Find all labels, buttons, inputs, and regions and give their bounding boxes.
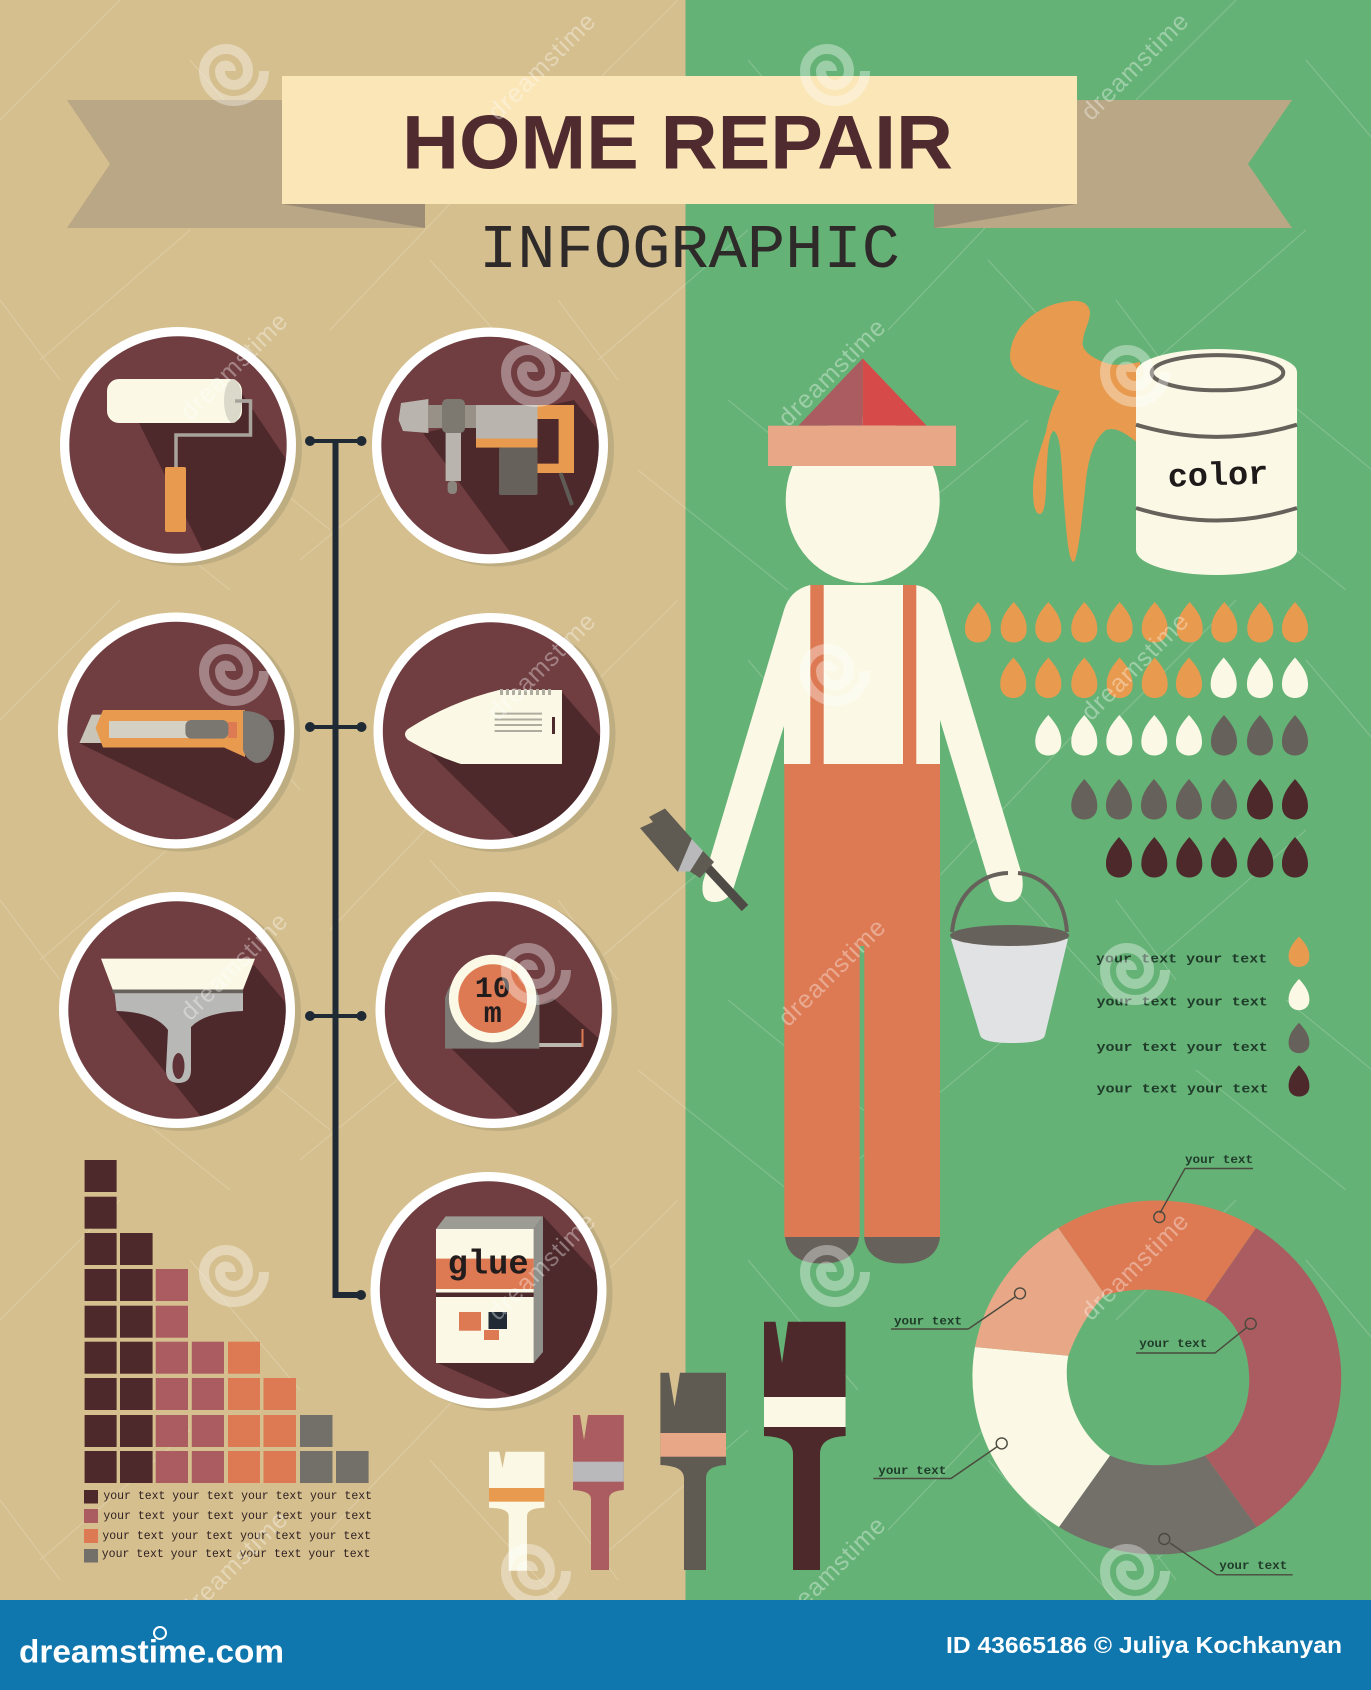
bucket (950, 925, 1069, 1043)
icon: putty knife (59, 892, 301, 1131)
donut callouts: your text (1139, 1337, 1207, 1351)
drops legend: your text your text (1096, 952, 1267, 966)
bucket handle (952, 873, 1067, 932)
worker figure (640, 358, 1069, 1263)
hand brush (640, 808, 745, 908)
watermark: dreamstime (483, 607, 602, 726)
icon: paint roller (60, 327, 302, 566)
suspenders (810, 585, 916, 765)
icon: tape measure (376, 892, 618, 1131)
trousers (784, 764, 940, 1237)
drops legend: your text your text (1096, 995, 1268, 1009)
body and arms (702, 585, 1023, 902)
paint splash (1010, 301, 1140, 562)
watermark: dreamstime (1076, 7, 1195, 126)
footer credit: ID 43665186 © Juliya Kochkanyan (946, 1632, 1342, 1658)
icon: rose brush (573, 1415, 624, 1570)
footer logo: dreamstime.com (19, 1634, 284, 1670)
watermark: dreamstime (1076, 607, 1195, 726)
connector line (306, 436, 366, 1300)
bar chart legend (84, 1490, 372, 1562)
donut callouts: your text (1185, 1153, 1253, 1167)
watermark: dreamstime (175, 907, 294, 1026)
icon: hammer drill (372, 328, 614, 580)
donut callouts: your text (894, 1315, 962, 1329)
stacked bar chart (85, 1160, 369, 1483)
background: green panel (686, 0, 1371, 1600)
donut callouts: your text (878, 1464, 946, 1478)
hat (768, 358, 956, 466)
footer bar (0, 1600, 1371, 1690)
tape label: 10 (475, 973, 511, 1007)
head (786, 417, 940, 583)
bar chart legend: your text your text your text your text (102, 1530, 371, 1543)
paint drops grid (965, 602, 1308, 878)
subtitle: infographic: INFOGRAPHIC (479, 215, 900, 286)
shoes (785, 1237, 940, 1264)
paint can (1136, 349, 1297, 575)
bar chart legend: your text your text your text your text (103, 1510, 372, 1523)
watermark: dreamstime (175, 307, 294, 426)
title ribbon (67, 76, 1292, 228)
donut callouts (873, 1153, 1293, 1575)
bar chart legend: your text your text your text your text (102, 1548, 370, 1561)
watermark: dreamstime (1076, 1207, 1195, 1326)
watermark: dreamstime (773, 913, 892, 1032)
watermark: dreamstime (175, 1505, 294, 1624)
icon: plastering float (374, 613, 616, 860)
donut chart (972, 1200, 1341, 1555)
icon: tape measure: m (484, 998, 502, 1032)
drops legend: your text your text (1096, 1083, 1268, 1097)
icon: cream brush (489, 1452, 544, 1571)
drops legend: your text your text (1096, 1041, 1268, 1055)
drops legend (1096, 936, 1309, 1097)
watermark: dreamstime (773, 1511, 892, 1630)
title: home repair: HOME REPAIR (402, 100, 953, 186)
can label: color (1167, 456, 1269, 497)
donut callouts: your text (1219, 1559, 1287, 1573)
icon: utility knife (58, 612, 300, 852)
background: tan panel (0, 0, 686, 1600)
watermark: dreamstime (483, 7, 602, 126)
glue label: glue (448, 1247, 529, 1285)
icon: gray brush (660, 1373, 726, 1570)
watermark: dreamstime (483, 1207, 602, 1326)
bar chart legend: your text your text your text your text (103, 1490, 372, 1503)
watermark (175, 7, 1195, 1630)
icon: dark brush (764, 1322, 846, 1570)
icon: glue box (370, 1172, 612, 1411)
watermark: dreamstime (773, 313, 892, 432)
